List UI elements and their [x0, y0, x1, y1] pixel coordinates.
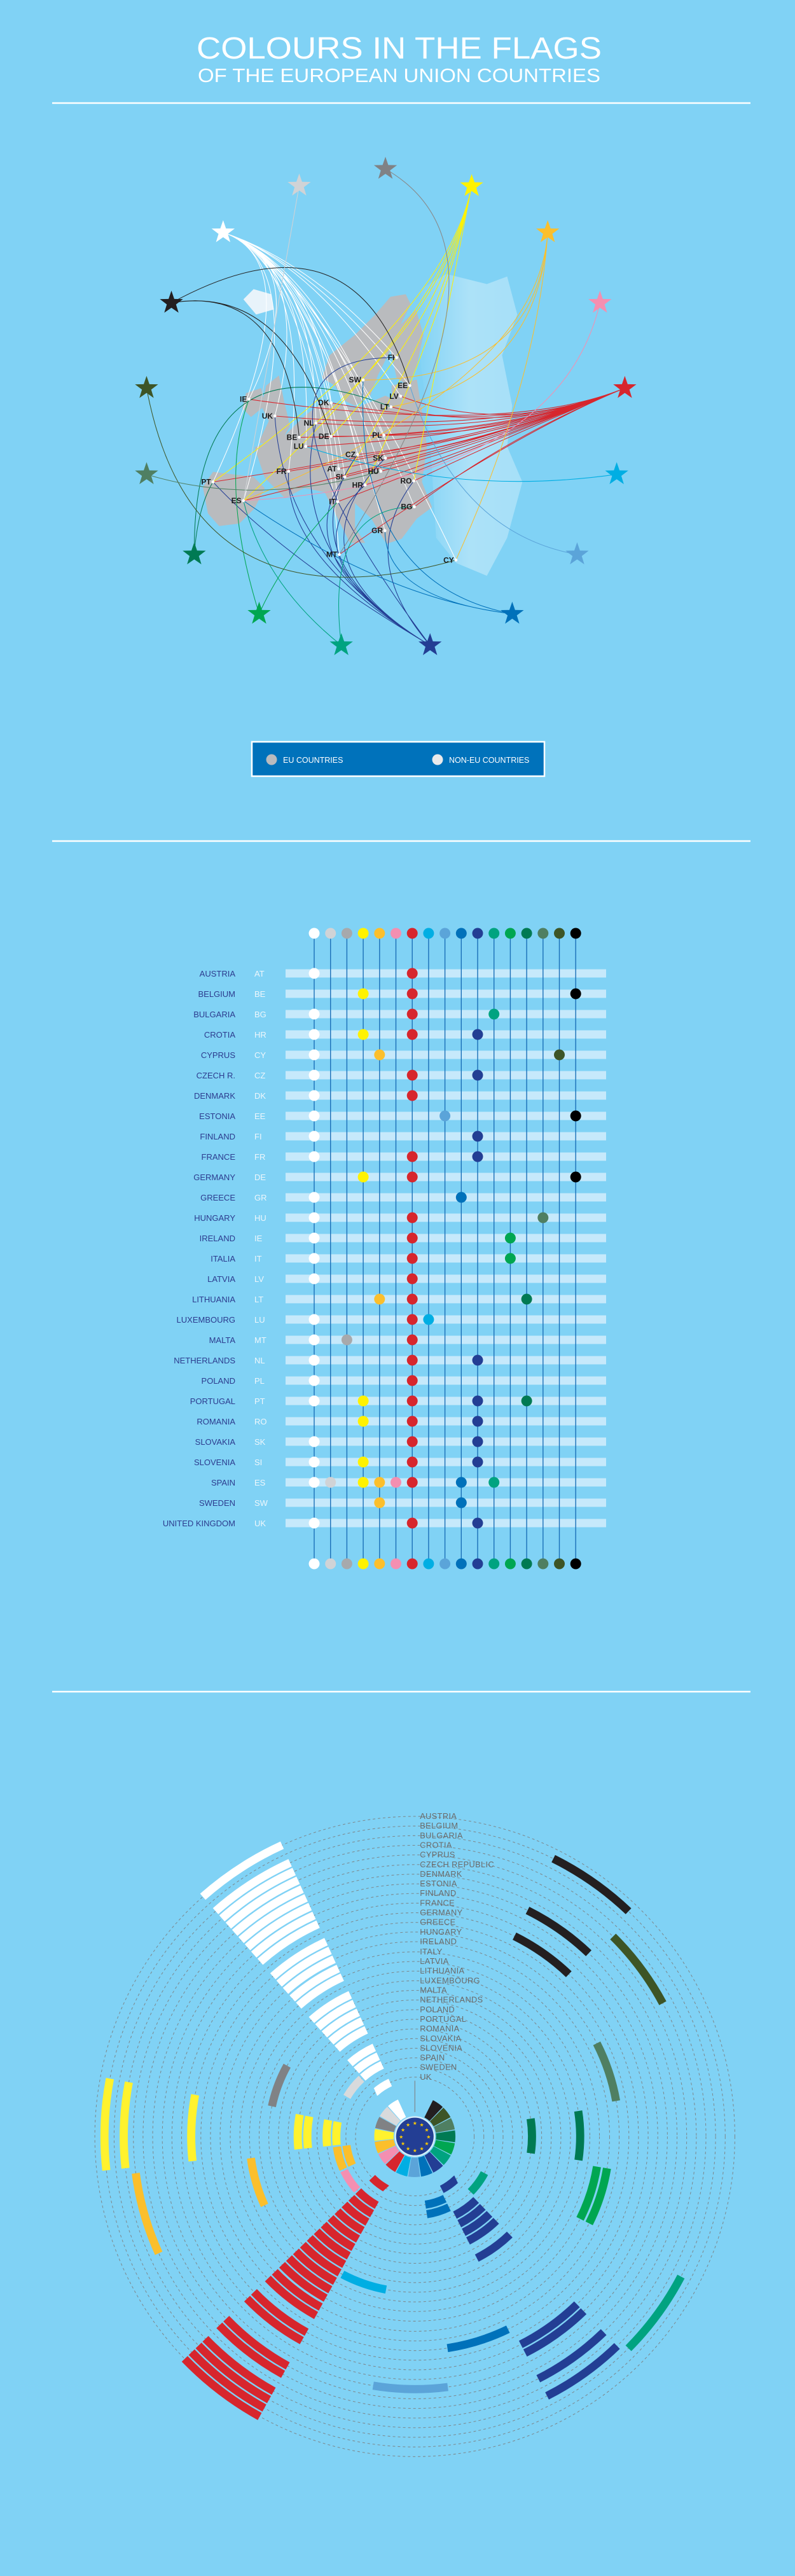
country codes: PT	[254, 1396, 265, 1406]
country codes: HU	[254, 1213, 266, 1223]
legend: EU COUNTRIES	[283, 756, 343, 765]
country names: UNITED KINGDOM	[163, 1519, 235, 1528]
country names: CZECH R.	[197, 1071, 235, 1080]
country codes: MT	[254, 1335, 266, 1345]
country labels: GR	[371, 526, 383, 535]
country ring labels: SWEDEN	[420, 2063, 457, 2072]
country names: LITHUANIA	[192, 1295, 235, 1304]
country ring labels: SLOVAKIA	[420, 2033, 462, 2043]
country labels: CY	[443, 555, 454, 564]
country codes: LT	[254, 1295, 263, 1304]
country names: HUNGARY	[194, 1213, 235, 1223]
dashed country rings	[95, 1816, 735, 2456]
country names: GERMANY	[193, 1173, 235, 1182]
EU flag centre: ★	[406, 2146, 410, 2152]
country labels: IE	[240, 395, 247, 404]
country labels: LV	[389, 392, 399, 401]
country ring labels: BELGIUM	[420, 1821, 458, 1830]
country ring labels: HUNGARY	[420, 1927, 462, 1937]
country ring labels: MALTA	[420, 1986, 447, 1995]
country codes: LV	[254, 1274, 264, 1284]
country ring labels: ITALY	[420, 1947, 443, 1956]
EU flag centre: ★	[406, 2122, 410, 2128]
country codes: EE	[254, 1111, 266, 1121]
country codes: AT	[254, 969, 265, 978]
country labels: EE	[398, 381, 408, 390]
country names: ROMANIA	[197, 1417, 235, 1426]
country labels: LU	[294, 442, 304, 451]
country ring labels: BULGARIA	[420, 1830, 463, 1840]
country ring labels: ESTONIA	[420, 1879, 457, 1888]
country labels: HR	[352, 480, 363, 489]
country names: FINLAND	[200, 1132, 235, 1141]
country labels: UK	[262, 412, 273, 421]
country ring labels: IRELAND	[420, 1937, 457, 1946]
country labels: IT	[329, 498, 336, 506]
country labels: LT	[380, 403, 389, 412]
country ring labels: SPAIN	[420, 2053, 445, 2063]
country labels: ES	[232, 496, 242, 505]
country ring labels: FRANCE	[420, 1898, 455, 1907]
country ring labels: LATVIA	[420, 1956, 449, 1966]
country ring labels: CROTIA	[420, 1840, 452, 1849]
country codes: SW	[254, 1498, 268, 1508]
country labels: SW	[349, 375, 361, 384]
country names: DENMARK	[194, 1091, 235, 1101]
country ring labels: PORTUGAL	[420, 2014, 466, 2024]
country names: BELGIUM	[198, 989, 235, 999]
inner colour wheel	[371, 2092, 459, 2180]
country names: LUXEMBOURG	[177, 1315, 235, 1325]
country labels: FR	[277, 467, 287, 476]
country names: SWEDEN	[199, 1498, 235, 1508]
country names: GREECE	[200, 1193, 235, 1202]
country codes: SI	[254, 1458, 262, 1467]
country codes: CY	[254, 1050, 266, 1060]
EU flag centre	[394, 2116, 435, 2157]
country codes: DE	[254, 1173, 266, 1182]
country codes: NL	[254, 1356, 265, 1365]
EU flag centre: ★	[399, 2134, 403, 2140]
country codes: GR	[254, 1193, 267, 1202]
country names	[163, 969, 235, 1528]
country codes: UK	[254, 1519, 266, 1528]
connection lines	[146, 169, 625, 645]
country ring labels: UK	[420, 2072, 432, 2082]
country codes: FR	[254, 1152, 265, 1162]
country codes: HR	[254, 1030, 266, 1040]
legend	[252, 742, 544, 776]
EU flag centre: ★	[401, 2141, 405, 2147]
country labels: PT	[201, 478, 211, 487]
map: flag colour connections	[135, 157, 637, 655]
country labels	[201, 353, 454, 564]
country ring labels: GERMANY	[420, 1908, 463, 1918]
country names: SLOVAKIA	[195, 1437, 235, 1447]
country codes: PL	[254, 1376, 265, 1386]
country codes: SK	[254, 1437, 266, 1447]
country names: LATVIA	[207, 1274, 235, 1284]
country labels: SK	[373, 454, 384, 463]
country codes: CZ	[254, 1071, 265, 1080]
country names: BULGARIA	[193, 1010, 235, 1019]
country codes: DK	[254, 1091, 266, 1101]
country names: PORTUGAL	[190, 1396, 235, 1406]
radial chart: colour arcs per country	[0, 1685, 795, 2576]
country codes: FI	[254, 1132, 262, 1141]
EU flag centre: ★	[419, 2146, 424, 2152]
EU flag centre: ★	[401, 2127, 405, 2133]
map of Europe	[203, 274, 522, 576]
country labels: HU	[368, 467, 379, 476]
country names: IRELAND	[200, 1234, 235, 1243]
colour arcs	[0, 1685, 795, 2576]
EU flag centre: ★	[426, 2134, 431, 2140]
country names: FRANCE	[202, 1152, 235, 1162]
country labels: PL	[372, 431, 382, 440]
country ring labels: ROMANIA	[420, 2024, 460, 2033]
country names: SLOVENIA	[194, 1458, 235, 1467]
country labels: SI	[336, 473, 343, 482]
country ring labels: FINLAND	[420, 1888, 457, 1898]
colour stars	[135, 157, 637, 655]
country ring labels: NETHERLANDS	[420, 1995, 483, 2005]
country ring labels: CYPRUS	[420, 1850, 455, 1860]
title	[197, 32, 602, 87]
title: COLOURS IN THE FLAGS	[197, 32, 602, 66]
country ring labels: CZECH REPUBLIC	[420, 1860, 494, 1869]
country names: NETHERLANDS	[174, 1356, 235, 1365]
country codes: IE	[254, 1234, 263, 1243]
country names: ESTONIA	[199, 1111, 235, 1121]
country labels: DE	[319, 432, 329, 441]
EU flag centre: ★	[424, 2141, 429, 2147]
country labels: CZ	[345, 450, 356, 459]
country ring labels: DENMARK	[420, 1869, 462, 1879]
country ring labels: GREECE	[420, 1918, 455, 1927]
country labels: DK	[318, 398, 329, 407]
EU flag centre: ★	[424, 2127, 429, 2133]
country names: SPAIN	[211, 1478, 235, 1487]
country ring labels: LUXEMBOURG	[420, 1975, 480, 1985]
country codes: ES	[254, 1478, 266, 1487]
country codes: RO	[254, 1417, 267, 1426]
country labels: MT	[326, 550, 338, 559]
title: OF THE EUROPEAN UNION COUNTRIES	[198, 64, 600, 87]
country names: AUSTRIA	[200, 969, 235, 978]
country ring labels: LITHUANIA	[420, 1966, 465, 1975]
colour key dots top and bottom	[309, 928, 581, 1569]
country names: POLAND	[202, 1376, 235, 1386]
EU flag centre: ★	[413, 2148, 417, 2154]
country codes: BE	[254, 989, 266, 999]
country codes: IT	[254, 1254, 262, 1264]
country ring labels: AUSTRIA	[420, 1811, 457, 1821]
country codes	[254, 969, 268, 1528]
EU flag centre: ★	[419, 2122, 424, 2128]
country ring labels	[420, 1811, 494, 2082]
country names: CROTIA	[204, 1030, 235, 1040]
matrix chart: colours per country	[163, 928, 606, 1569]
country codes: BG	[254, 1010, 266, 1019]
EU flag centre: ★	[413, 2120, 417, 2126]
country names: MALTA	[209, 1335, 235, 1345]
country codes: LU	[254, 1315, 265, 1325]
country labels: AT	[327, 464, 337, 473]
country names: ITALIA	[211, 1254, 235, 1264]
country ring labels: SLOVENIA	[420, 2043, 462, 2052]
country labels: BE	[287, 433, 297, 442]
country labels: FI	[388, 353, 394, 362]
legend: NON-EU COUNTRIES	[449, 756, 529, 765]
country labels: NL	[304, 419, 314, 428]
country labels: RO	[401, 477, 411, 485]
data dots	[309, 968, 581, 1528]
country labels: BG	[401, 503, 412, 512]
country ring labels: POLAND	[420, 2005, 455, 2014]
country names: CYPRUS	[201, 1050, 235, 1060]
